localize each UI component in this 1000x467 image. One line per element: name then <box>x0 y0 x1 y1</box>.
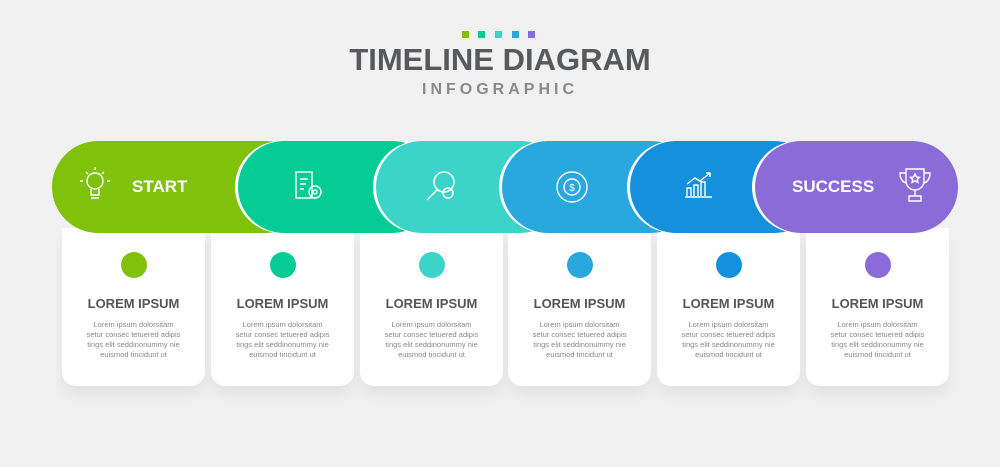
card 2: setur consec tetuered adipis <box>236 330 329 339</box>
card 6: Lorem ipsum dolorsitam <box>837 320 918 329</box>
subtitle: INFOGRAPHIC <box>422 81 578 98</box>
card 2: LOREM IPSUM <box>237 296 328 311</box>
pill: step 2 <box>238 141 438 233</box>
card 4: setur consec tetuered adipis <box>533 330 626 339</box>
card 3: LOREM IPSUM <box>386 296 477 311</box>
card 5: setur consec tetuered adipis <box>682 330 775 339</box>
pill: success <box>755 141 958 233</box>
card 5: Lorem ipsum dolorsitam <box>688 320 769 329</box>
card 6: tings elit seddinonummy nie <box>831 340 924 349</box>
card 4: tings elit seddinonummy nie <box>533 340 626 349</box>
card 3: euismod tincidunt ut <box>398 350 465 359</box>
card 1: setur consec tetuered adipis <box>87 330 180 339</box>
pill: step 5 <box>630 141 820 233</box>
icon: dollar target: $ <box>569 183 575 194</box>
icon: chart <box>685 172 712 198</box>
card 4: Lorem ipsum dolorsitam <box>539 320 620 329</box>
card 5: euismod tincidunt ut <box>695 350 762 359</box>
title dots <box>462 31 535 38</box>
icon: checklist <box>295 171 322 199</box>
card 1 <box>62 228 205 386</box>
card 6: setur consec tetuered adipis <box>831 330 924 339</box>
card 3 <box>360 228 503 386</box>
pill: start: START <box>132 177 187 196</box>
card 4 <box>508 228 651 386</box>
pill: success: SUCCESS <box>792 177 874 196</box>
card 1: euismod tincidunt ut <box>100 350 167 359</box>
card 3: Lorem ipsum dolorsitam <box>391 320 472 329</box>
card 5: tings elit seddinonummy nie <box>682 340 775 349</box>
pill: step 4 <box>502 141 697 233</box>
card 6 <box>806 228 949 386</box>
card 1: tings elit seddinonummy nie <box>87 340 180 349</box>
icon: bulb <box>80 167 110 199</box>
card 5 <box>657 228 800 386</box>
card 6: LOREM IPSUM <box>832 296 923 311</box>
icon: dollar target <box>556 171 588 203</box>
card 2 <box>211 228 354 386</box>
icon: magnifier <box>426 171 455 200</box>
card 4: euismod tincidunt ut <box>546 350 613 359</box>
card 2: tings elit seddinonummy nie <box>236 340 329 349</box>
card 2: euismod tincidunt ut <box>249 350 316 359</box>
card 1: LOREM IPSUM <box>88 296 179 311</box>
card 1: Lorem ipsum dolorsitam <box>93 320 174 329</box>
card 5: LOREM IPSUM <box>683 296 774 311</box>
card 6: euismod tincidunt ut <box>844 350 911 359</box>
title: TIMELINE DIAGRAM <box>349 42 651 77</box>
icon: trophy <box>899 168 931 202</box>
card 3: setur consec tetuered adipis <box>385 330 478 339</box>
pill: step 3 <box>376 141 566 233</box>
card 4: LOREM IPSUM <box>534 296 625 311</box>
card 3: tings elit seddinonummy nie <box>385 340 478 349</box>
pill: start <box>52 141 312 233</box>
card 2: Lorem ipsum dolorsitam <box>242 320 323 329</box>
